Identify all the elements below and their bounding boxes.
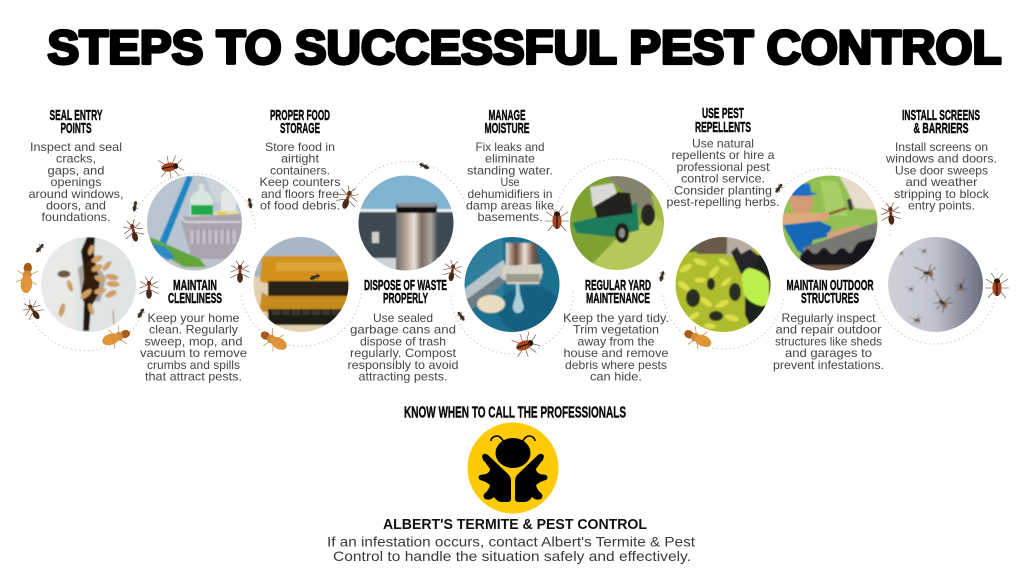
- heading: PROPER FOOD: [270, 107, 330, 124]
- description: Keep the yard tidy.: [563, 312, 669, 325]
- description: house and remove: [564, 347, 668, 360]
- step 7: use pest repellents: [666, 105, 780, 209]
- description: openings: [50, 176, 102, 189]
- description: attracting pests.: [358, 370, 448, 384]
- heading: USE PEST: [702, 105, 744, 122]
- description: [773, 312, 884, 372]
- description: doors, and: [46, 200, 106, 212]
- heading: [786, 277, 874, 307]
- description: dehumidifiers in: [468, 188, 552, 201]
- heading: [270, 107, 330, 137]
- description: and floors free: [261, 188, 339, 201]
- heading: [50, 107, 102, 137]
- description: and garages to: [785, 347, 872, 360]
- photo: dripping faucet: [463, 236, 562, 334]
- description: stripping to block: [894, 188, 989, 201]
- description: structures like sheds: [775, 335, 882, 348]
- logo: yellow circle with black bug: [468, 422, 558, 514]
- description: professional pest: [676, 161, 770, 174]
- description: Keep counters: [260, 176, 341, 189]
- photo: insects on window screen: [887, 236, 984, 334]
- closing text: [327, 535, 695, 564]
- description: Use: [500, 176, 520, 189]
- description: foundations.: [42, 211, 110, 224]
- description: [466, 141, 554, 224]
- description: debris where pests: [565, 359, 667, 372]
- heading: STRUCTURES: [801, 290, 859, 307]
- insects scattered around the rings: [15, 153, 1009, 360]
- photo: man repairing roof: [782, 174, 880, 273]
- description: Install screens on: [895, 141, 988, 154]
- step 1: seal entry points: [28, 107, 123, 224]
- description: Inspect and seal: [30, 141, 122, 154]
- heading: SEAL ENTRY: [50, 107, 102, 124]
- description: crumbs and spills: [147, 359, 240, 372]
- heading: REPELLENTS: [695, 119, 751, 136]
- description: windows and doors.: [885, 153, 997, 166]
- step 9: install screens and barriers: [885, 107, 997, 212]
- heading: DISPOSE OF WASTE: [364, 277, 447, 294]
- step 3: proper food storage: [260, 107, 341, 212]
- description: eliminate: [485, 153, 535, 166]
- heading: POINTS: [60, 120, 92, 137]
- description: garbage cans and: [350, 324, 456, 337]
- step 2: maintain cleanliness: [140, 277, 247, 384]
- description: Use sealed: [373, 312, 433, 325]
- step 6: regular yard maintenance: [563, 277, 669, 384]
- photo: termites in wall crack: [40, 236, 137, 334]
- heading: STORAGE: [280, 120, 320, 137]
- description: Fix leaks and: [476, 141, 544, 154]
- description: [140, 312, 247, 384]
- heading: [168, 277, 222, 307]
- description: basements.: [478, 211, 542, 224]
- description: cracks,: [56, 153, 96, 166]
- step 4: dispose of waste properly: [348, 277, 458, 384]
- call the professionals heading: KNOW WHEN TO CALL THE PROFESSIONALS: [404, 404, 626, 422]
- description: vacuum to remove: [140, 347, 247, 360]
- description: away from the: [578, 335, 654, 348]
- description: pest-repelling herbs.: [666, 196, 780, 209]
- heading: MAINTENANCE: [586, 290, 650, 307]
- closing text: Control to handle the situation safely and effectively.: [333, 549, 691, 564]
- description: Use door sweeps: [895, 164, 988, 177]
- heading: CLENLINESS: [168, 290, 222, 307]
- photo: food storage containers: [253, 236, 350, 335]
- photo: spraying plants: [675, 236, 775, 335]
- description: Consider planting: [674, 184, 772, 197]
- description: around windows,: [28, 188, 123, 201]
- heading: MAINTAIN OUTDOOR: [786, 277, 874, 294]
- description: [563, 312, 669, 384]
- description: that attract pests.: [145, 370, 242, 384]
- description: [28, 141, 123, 224]
- description: [885, 141, 997, 212]
- heading: [902, 107, 980, 137]
- title: STEPS TO SUCCESSFUL PEST CONTROL: [48, 20, 1002, 74]
- description: Regularly inspect: [782, 312, 876, 325]
- description: repellents or hire a: [672, 149, 775, 162]
- description: damp areas like: [466, 200, 554, 212]
- company name: ALBERT'S TERMITE & PEST CONTROL: [383, 516, 647, 533]
- description: entry points.: [908, 200, 975, 212]
- step 5: manage moisture: [466, 107, 554, 224]
- description: and repair outdoor: [776, 324, 882, 337]
- heading: MANAGE: [488, 107, 526, 124]
- description: control service.: [681, 173, 765, 186]
- heading: [695, 105, 751, 136]
- dotted rings linking the steps: [23, 159, 998, 354]
- description: airtight: [281, 153, 320, 166]
- heading: PROPERLY: [383, 290, 428, 307]
- description: prevent infestations.: [773, 359, 884, 372]
- description: standing water.: [467, 164, 553, 177]
- description: clean. Regularly: [149, 324, 238, 337]
- description: gaps, and: [48, 164, 104, 177]
- description: of food debris.: [260, 200, 340, 212]
- photo: stainless trash can: [357, 175, 455, 272]
- description: Trim vegetation: [573, 324, 659, 337]
- closing text: If an infestation occurs, contact Albert's Termite & Pest: [327, 535, 695, 550]
- heading: REGULAR YARD: [585, 277, 651, 294]
- description: Use natural: [692, 138, 754, 150]
- photo: lawn mower on grass: [569, 174, 665, 272]
- description: dispose of trash: [360, 335, 446, 348]
- description: containers.: [270, 164, 330, 177]
- description: can hide.: [590, 370, 642, 384]
- heading: [585, 277, 651, 307]
- description: [666, 138, 780, 209]
- heading: MOISTURE: [484, 120, 530, 137]
- description: and weather: [906, 176, 978, 189]
- description: regularly. Compost: [350, 347, 457, 360]
- step 8: maintain outdoor structures: [773, 277, 884, 372]
- heading: [364, 277, 447, 307]
- description: [260, 141, 341, 212]
- description: responsibly to avoid: [348, 359, 458, 372]
- description: sweep, mop, and: [144, 335, 242, 348]
- heading: & BARRIERS: [914, 120, 968, 137]
- description: Keep your home: [148, 312, 240, 325]
- photo: cleaning supplies and mop: [146, 175, 245, 272]
- heading: [484, 107, 530, 137]
- description: Store food in: [265, 141, 335, 154]
- description: [348, 312, 458, 384]
- heading: MAINTAIN: [173, 277, 217, 294]
